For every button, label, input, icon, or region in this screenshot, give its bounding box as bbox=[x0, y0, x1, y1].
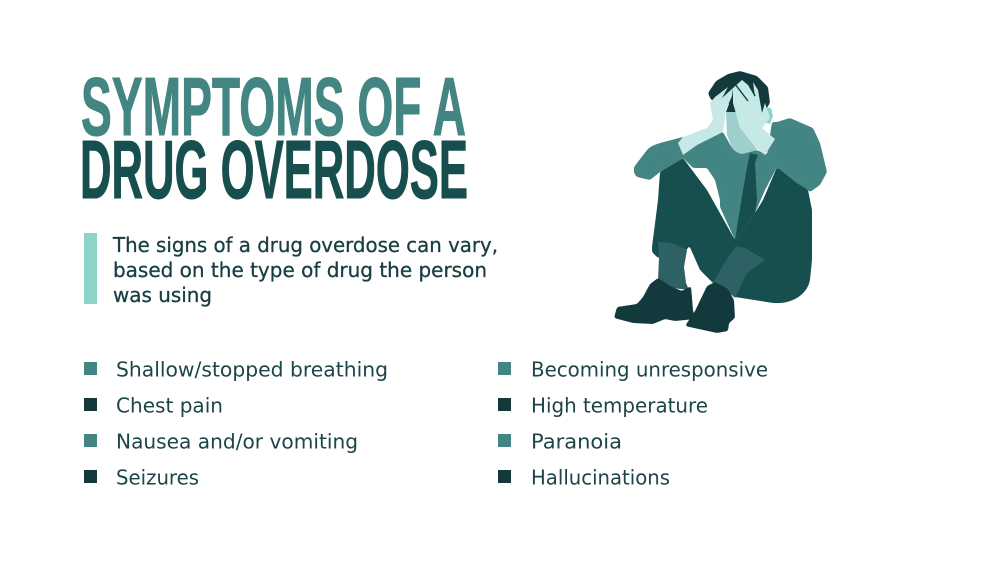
right shoe bbox=[685, 282, 735, 333]
tie bbox=[735, 153, 758, 240]
item: nausea: Nausea and/or vomiting bbox=[116, 430, 358, 454]
ear bbox=[764, 107, 773, 124]
jacket and arms bbox=[634, 118, 827, 240]
right sock bbox=[713, 247, 765, 298]
title: SYMPTOMS OF A bbox=[81, 60, 466, 153]
item: high temperature: High temperature bbox=[531, 394, 708, 418]
symptom list: left column bbox=[84, 358, 388, 490]
right hand and forearm bbox=[733, 80, 775, 155]
title: DRUG OVERDOSE bbox=[80, 123, 468, 216]
face bbox=[726, 112, 757, 154]
illustration: distressed seated man bbox=[614, 71, 827, 333]
intro text block bbox=[112, 233, 498, 307]
intro text block: The signs of a drug overdose can vary, bbox=[112, 233, 498, 257]
item: hallucinations: Hallucinations bbox=[531, 466, 670, 490]
intro text block: based on the type of drug the person bbox=[113, 258, 487, 282]
item: paranoia: Paranoia bbox=[531, 430, 622, 454]
item: chest pain: Chest pain bbox=[116, 394, 223, 418]
item: seizures: Seizures bbox=[116, 466, 199, 490]
gap between hands bbox=[726, 96, 737, 112]
intro text block: was using bbox=[113, 283, 212, 307]
left hand and forearm bbox=[678, 87, 733, 155]
finger gaps bbox=[735, 80, 755, 101]
left shoe bbox=[614, 278, 695, 324]
hair bbox=[708, 71, 770, 114]
left sock bbox=[658, 242, 689, 290]
item: unresponsive: Becoming unresponsive bbox=[531, 358, 768, 382]
item: shallow breathing: Shallow/stopped breathing bbox=[116, 358, 388, 382]
accent bar bbox=[84, 233, 97, 304]
title bbox=[80, 60, 468, 216]
trousers bbox=[652, 158, 812, 303]
symptom list: right column bbox=[498, 358, 768, 490]
